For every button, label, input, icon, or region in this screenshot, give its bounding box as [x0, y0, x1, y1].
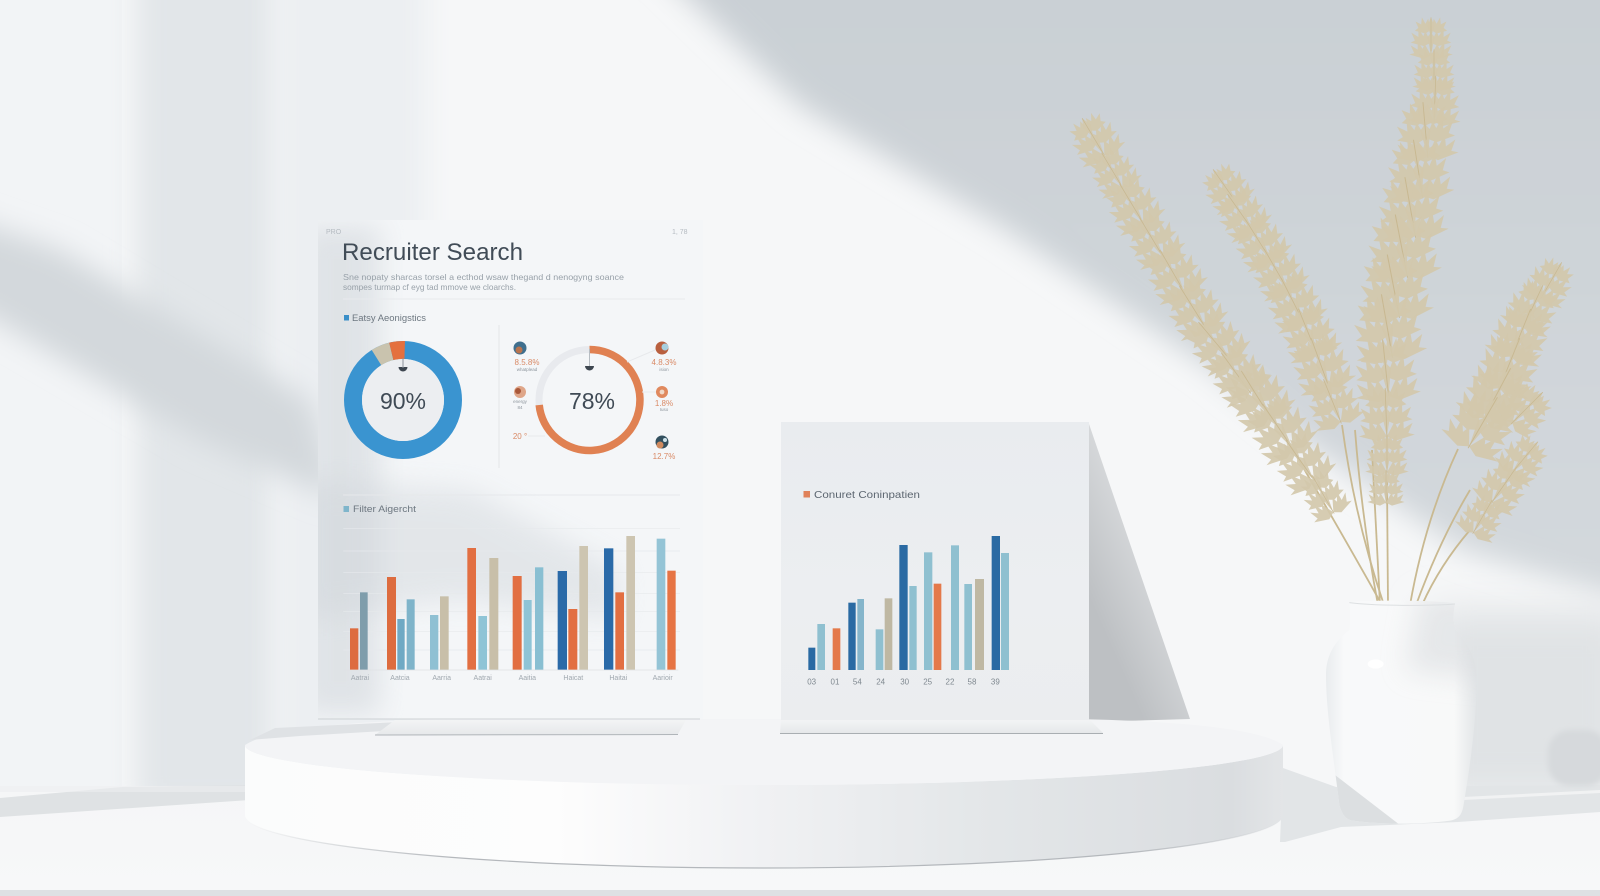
base plate: comparison card: [780, 720, 1103, 733]
legend: demographics: Eatsy Aeonigstics: [352, 313, 427, 323]
comparison axis labels: 30: [900, 678, 910, 687]
callout captions: ision: [659, 367, 669, 372]
plume 3: [1346, 17, 1462, 506]
plume 4: [1438, 251, 1582, 467]
ring callouts: [513, 342, 676, 461]
donut chart 90%: 90%: [380, 388, 426, 414]
report card: Recruiter Search: [300, 220, 703, 719]
title: Recruiter Search: [342, 239, 523, 266]
callout captions: Iuso: [660, 407, 669, 412]
description: [343, 272, 624, 292]
bar chart axis labels: Aatcia: [390, 675, 410, 682]
round platform: [245, 719, 1283, 868]
legend: comparison: Conuret Coninpatien: [814, 489, 920, 501]
comparison axis labels: 54: [853, 678, 862, 687]
legend: filter: Filter Aigercht: [353, 504, 416, 515]
avatar 2: [514, 386, 526, 398]
callout values: 4.8.3%: [652, 358, 676, 367]
bar chart axis labels: Aaitia: [519, 675, 536, 682]
plant: dried pampas stems: [1061, 17, 1582, 605]
donut chart 90%: [353, 350, 453, 450]
vase highlight: [1368, 659, 1384, 669]
vase lower shadow: [1335, 775, 1400, 825]
plume 5: [1453, 427, 1556, 546]
callout values: 1.8%: [655, 399, 673, 408]
callout values: [513, 358, 676, 461]
callout captions: 84: [517, 405, 523, 410]
description: sompes turmap cf eyg tad mmove we cloarchs.: [343, 282, 516, 292]
plume 1: [1061, 105, 1354, 527]
comparison axis labels: 58: [968, 678, 977, 687]
comparison axis labels: [807, 678, 1000, 687]
vase shoulder shadow: [1408, 601, 1472, 678]
plume 2: [1194, 156, 1367, 436]
grouped bar chart: [343, 528, 680, 682]
comparison axis labels: 01: [831, 678, 840, 687]
avatar 1: [514, 342, 526, 354]
platform top: [245, 719, 1283, 785]
card header marks: PRO: [326, 229, 342, 236]
bar chart axis labels: Aarria: [432, 675, 451, 682]
bar chart axis labels: Haicat: [563, 675, 583, 682]
card header marks: [326, 229, 688, 236]
comparison axis labels: 39: [991, 678, 1000, 687]
description: Sne nopaty sharcas torsel a ecthod wsaw thegand d nenogyng soance: [343, 272, 624, 282]
floor: [0, 730, 1600, 896]
bar chart axis labels: Aatrai: [474, 675, 492, 682]
stems: [1290, 425, 1470, 605]
comparison axis labels: 22: [946, 678, 955, 687]
white vase: [1326, 600, 1470, 824]
base plate: report card: [375, 720, 686, 735]
bar chart axis labels: Haitai: [609, 675, 628, 682]
comparison bar chart: [807, 536, 1009, 687]
comparison axis labels: 25: [923, 678, 933, 687]
comparison axis labels: 03: [807, 678, 817, 687]
avatar 4: [656, 386, 668, 398]
callout values: 8.5.8%: [515, 358, 539, 367]
bar chart axis labels: [351, 675, 673, 682]
callout captions: energy: [513, 399, 528, 404]
card shadow on wall: [1089, 424, 1190, 722]
callout values: 12.7%: [653, 452, 675, 461]
comparison axis labels: 24: [876, 678, 886, 687]
vase rim: [1349, 603, 1455, 605]
card shading: [300, 225, 620, 715]
ring chart 78%: [539, 349, 640, 450]
avatar 5: [656, 436, 668, 448]
ring chart 78%: 78%: [569, 388, 615, 414]
comparison card: [781, 422, 1089, 720]
platform side: [245, 745, 1283, 868]
callout captions: [513, 367, 669, 412]
bar chart axis labels: Aatrai: [351, 675, 370, 682]
avatar 3: [656, 342, 668, 354]
card header marks: 1, 78: [672, 229, 688, 236]
callout captions: whatplead: [517, 367, 538, 372]
callout values: 20 °: [513, 432, 527, 441]
bar chart axis labels: Aarioir: [653, 675, 673, 682]
